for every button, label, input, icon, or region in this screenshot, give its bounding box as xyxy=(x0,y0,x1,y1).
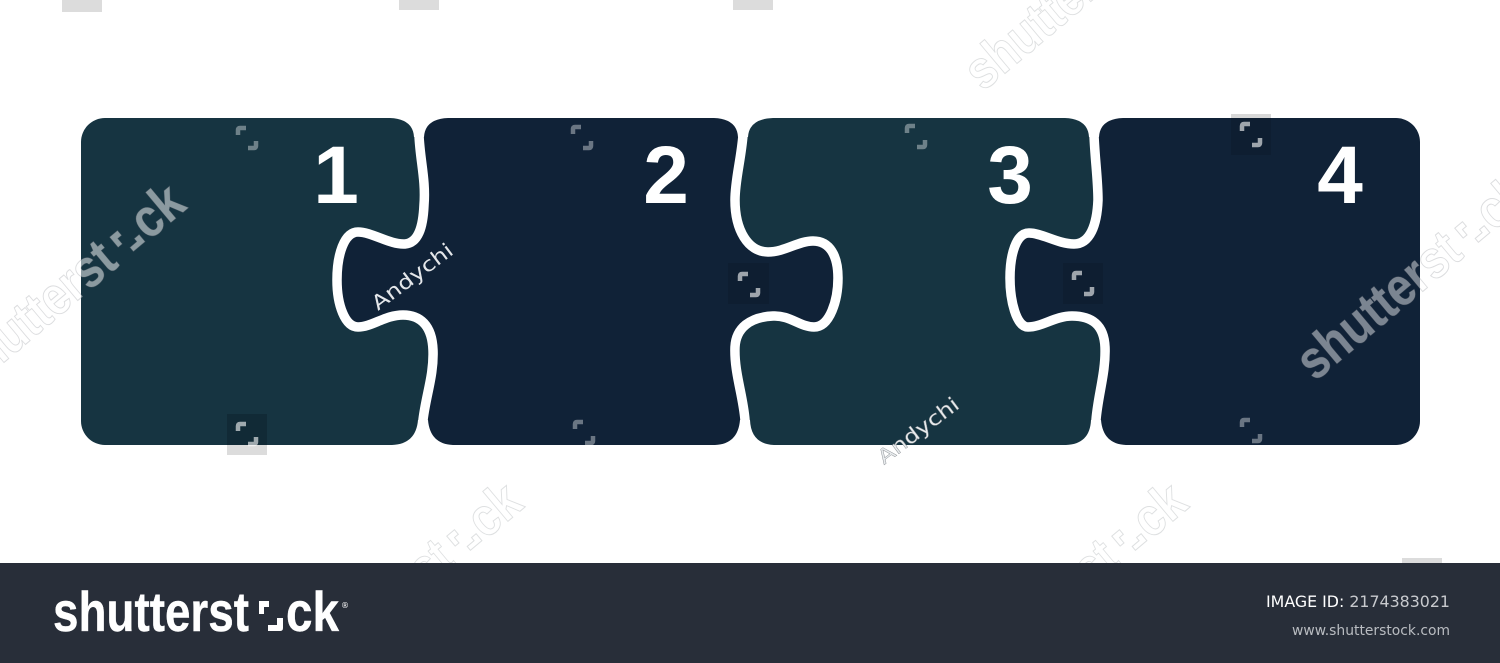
panel: puzzle piece 2 xyxy=(337,118,838,445)
author mark: Andychi on piece 2 tab: Andychi xyxy=(367,238,458,315)
shutterstock logo: ck xyxy=(286,580,340,643)
watermark: bottom right: ck xyxy=(1120,470,1199,549)
clipped watermark tiles at top edge xyxy=(62,0,1442,564)
watermark: bottom centre xyxy=(396,470,534,598)
panel: puzzle piece 4 xyxy=(1010,118,1420,445)
panel: puzzle piece 3 xyxy=(735,118,1105,445)
numeral 1: 1 xyxy=(313,130,359,221)
numeral 4: 4 xyxy=(1317,130,1363,221)
author mark: Andychi on piece 3: Andychi xyxy=(873,392,964,469)
watermark: left xyxy=(0,171,197,400)
numeral 3: 3 xyxy=(987,130,1033,221)
watermark: bottom right: st xyxy=(1061,527,1130,598)
watermark: bottom centre: st xyxy=(396,527,465,598)
shutterstock logo: ® xyxy=(341,601,349,610)
watermark bracket tiles xyxy=(227,114,1271,455)
watermark: bottom right xyxy=(1061,470,1199,598)
shutterstock logo: shutterst xyxy=(53,580,249,643)
watermark: left: ck xyxy=(118,171,197,250)
white seams between pieces xyxy=(337,125,1105,432)
website: www.shutterstock.com xyxy=(1292,623,1450,639)
footer bar xyxy=(0,563,1500,663)
image id: IMAGE ID: 2174383021 xyxy=(1266,592,1450,611)
numeral 2: 2 xyxy=(643,130,689,221)
rounded corner gaps between pieces xyxy=(390,116,1126,447)
watermark: bottom centre: ck xyxy=(455,470,534,549)
four-piece puzzle chain xyxy=(81,116,1420,447)
watermark: right: shutterst xyxy=(1284,219,1473,391)
panel: puzzle piece 1 xyxy=(81,118,433,445)
